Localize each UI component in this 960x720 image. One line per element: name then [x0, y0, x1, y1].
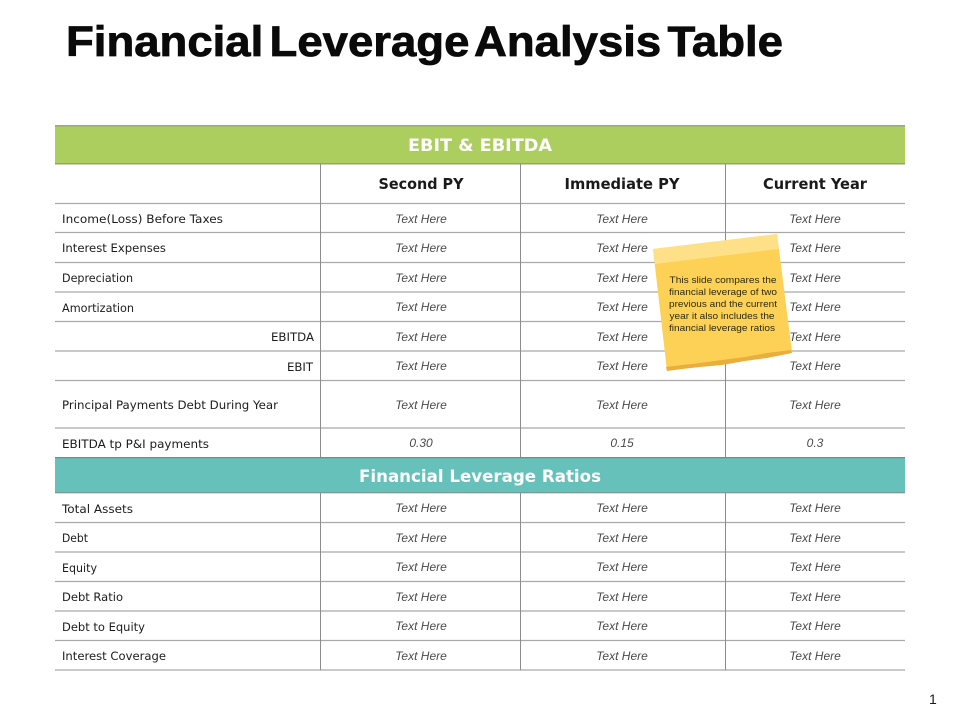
row: Depreciation	[62, 271, 841, 285]
row: Debt Ratio: Debt Ratio	[62, 590, 123, 604]
row: Debt to Equity: Text Here	[395, 619, 447, 633]
column headings: Immediate PY	[564, 175, 680, 193]
row: Amortization	[62, 300, 841, 315]
row: Income(Loss) Before Taxes: Text Here	[395, 212, 447, 226]
sticky note callout	[653, 234, 792, 371]
row: Interest Expenses: Text Here	[596, 241, 648, 255]
row: EBITDA: EBITDA	[271, 330, 314, 344]
row: Interest Coverage: Text Here	[789, 649, 841, 663]
row: Total Assets	[61, 501, 841, 516]
row: EBITDA tp P&I payments: 0.30	[409, 436, 433, 450]
row: Amortization: Text Here	[395, 300, 447, 314]
note text: previous and the current	[669, 299, 777, 309]
row: EBITDA	[271, 330, 841, 344]
row: EBIT	[287, 359, 841, 374]
column headings	[378, 175, 867, 193]
row: Depreciation: Text Here	[596, 271, 648, 285]
header band: Financial Leverage Ratios: Financial Leverage Ratios	[359, 467, 601, 487]
row: Income(Loss) Before Taxes	[62, 212, 841, 226]
row: Amortization: Text Here	[596, 300, 648, 314]
row: Interest Expenses: Text Here	[395, 241, 447, 255]
row: Debt: Debt	[62, 531, 88, 545]
row: Depreciation: Text Here	[395, 271, 447, 285]
row: EBITDA tp P&I payments: 0.15	[610, 436, 634, 450]
note text: financial leverage of two	[669, 287, 777, 297]
row: Income(Loss) Before Taxes: Income(Loss) Before Taxes	[62, 212, 223, 226]
row: Interest Expenses: Text Here	[789, 241, 841, 255]
column headings: Current Year	[763, 175, 867, 193]
row: EBITDA: Text Here	[789, 330, 841, 344]
row: Principal Payments Debt During Year: Text Here	[789, 398, 841, 412]
row: Income(Loss) Before Taxes: Text Here	[789, 212, 841, 226]
column lines	[320, 164, 726, 670]
row: Debt to Equity: Text Here	[596, 619, 648, 633]
row: Total Assets: Text Here	[596, 501, 648, 515]
row: EBITDA: Text Here	[596, 330, 648, 344]
row: Principal Payments Debt During Year: Text Here	[395, 398, 447, 412]
row: Debt: Text Here	[596, 531, 648, 545]
row: Interest Expenses	[62, 241, 841, 255]
row lines	[55, 204, 905, 670]
row: Total Assets: Text Here	[789, 501, 841, 515]
row: Principal Payments Debt During Year: Principal Payments Debt During Year	[62, 398, 278, 412]
header band: Financial Leverage Ratios	[55, 457, 905, 493]
row: Interest Coverage: Text Here	[596, 649, 648, 663]
note text	[669, 275, 777, 333]
row: Interest Expenses: Interest Expenses	[62, 241, 166, 255]
row: Total Assets: Text Here	[395, 501, 447, 515]
column headings: Second PY	[378, 175, 464, 193]
row: Debt to Equity	[62, 619, 841, 634]
row: Amortization: Amortization	[62, 301, 134, 315]
note text: This slide compares the	[670, 275, 776, 285]
row: Debt to Equity: Text Here	[789, 619, 841, 633]
row: Interest Coverage: Interest Coverage	[62, 649, 166, 663]
row: Debt Ratio: Text Here	[789, 590, 841, 604]
row: Amortization: Text Here	[789, 300, 841, 314]
row: Equity	[62, 560, 841, 575]
row: Interest Coverage	[62, 649, 841, 663]
table	[55, 125, 905, 670]
row: Debt to Equity: Debt to Equity	[62, 620, 145, 634]
row: EBITDA: Text Here	[395, 330, 447, 344]
row: Total Assets: Total Assets	[61, 502, 133, 516]
row: EBITDA tp P&I payments: EBITDA tp P&I payments	[62, 437, 209, 451]
row: EBITDA tp P&I payments	[62, 436, 824, 451]
row: Equity: Text Here	[395, 560, 447, 574]
row: EBIT: Text Here	[596, 359, 648, 373]
row: Depreciation: Depreciation	[62, 271, 133, 285]
note text: financial leverage ratios	[669, 323, 775, 333]
row: Principal Payments Debt During Year	[62, 398, 841, 412]
header band: EBIT & EBITDA	[55, 125, 905, 164]
row: Debt: Text Here	[395, 531, 447, 545]
row: Debt Ratio: Text Here	[395, 590, 447, 604]
row: EBITDA tp P&I payments: 0.3	[807, 436, 824, 450]
row: Debt Ratio	[62, 590, 841, 604]
row: Debt Ratio: Text Here	[596, 590, 648, 604]
row: Income(Loss) Before Taxes: Text Here	[596, 212, 648, 226]
row: EBIT: Text Here	[789, 359, 841, 373]
row: Equity: Text Here	[596, 560, 648, 574]
row: Equity: Text Here	[789, 560, 841, 574]
note text: year it also includes the	[670, 311, 774, 321]
row: Debt: Text Here	[789, 531, 841, 545]
row: EBIT: Text Here	[395, 359, 447, 373]
row: EBIT: EBIT	[287, 360, 314, 374]
title: Financial Leverage Analysis Table	[66, 18, 783, 66]
row: Interest Coverage: Text Here	[395, 649, 447, 663]
row: Equity: Equity	[62, 561, 97, 575]
header band: EBIT & EBITDA: EBIT & EBITDA	[408, 136, 553, 156]
page number: 1	[929, 691, 937, 707]
row: Principal Payments Debt During Year: Text Here	[596, 398, 648, 412]
row: Depreciation: Text Here	[789, 271, 841, 285]
row: Debt	[62, 531, 841, 545]
